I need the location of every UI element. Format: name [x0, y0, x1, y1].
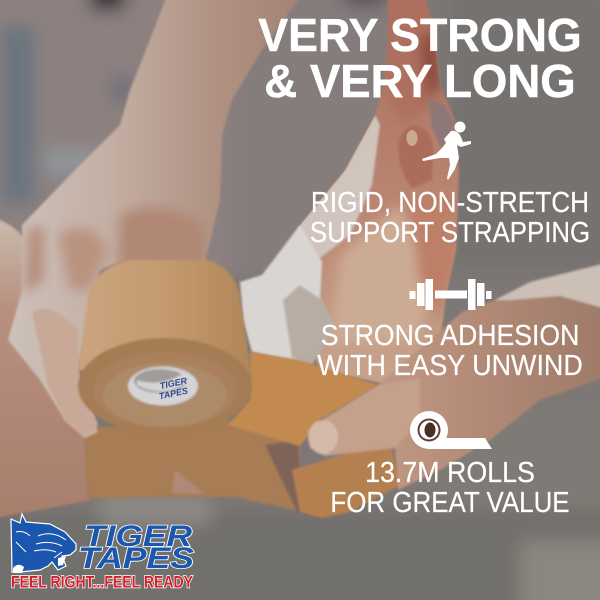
- text: rigid non-stretch: [310, 186, 590, 248]
- text: strong adhesion: WITH EASY UNWIND: [317, 350, 583, 382]
- icon: tape roll: [410, 411, 492, 449]
- logo: Tiger Tapes: [10, 512, 195, 592]
- text: rigid non-stretch: SUPPORT STRAPPING: [310, 216, 590, 248]
- lower tape flap: [292, 440, 400, 518]
- text: strong adhesion: STRONG ADHESION: [321, 320, 579, 352]
- title: & VERY LONG: [264, 54, 576, 106]
- tape strip from roll: [228, 352, 378, 446]
- icon: runner: [422, 122, 471, 180]
- roll core branding: TAPES: [158, 386, 189, 401]
- roll core branding: [156, 375, 190, 401]
- text: 13.7m rolls: 13.7M ROLLS: [365, 456, 535, 488]
- text: strong adhesion: [317, 320, 583, 382]
- lower right hand: [308, 262, 600, 490]
- roll core branding: TIGER: [159, 375, 188, 391]
- white gauze on ankle: [240, 225, 335, 365]
- title: [258, 8, 582, 106]
- wordmark: TAPES: [78, 542, 194, 575]
- foot: [298, 0, 460, 384]
- text: 13.7m rolls: FOR GREAT VALUE: [330, 486, 570, 518]
- tape wrapped on ankle: [84, 352, 400, 518]
- icon: dumbbell: [410, 279, 492, 310]
- wordmark: [78, 520, 194, 575]
- icon: tiger head: [11, 514, 76, 573]
- upper arm and hand: [8, 0, 302, 438]
- tape roll: [78, 260, 252, 434]
- left leg: [0, 218, 90, 518]
- title: VERY STRONG: [258, 8, 582, 60]
- wordmark: TIGER: [84, 520, 192, 553]
- text: 13.7m rolls: [330, 456, 570, 518]
- text: rigid non-stretch: RIGID, NON-STRETCH: [311, 186, 589, 218]
